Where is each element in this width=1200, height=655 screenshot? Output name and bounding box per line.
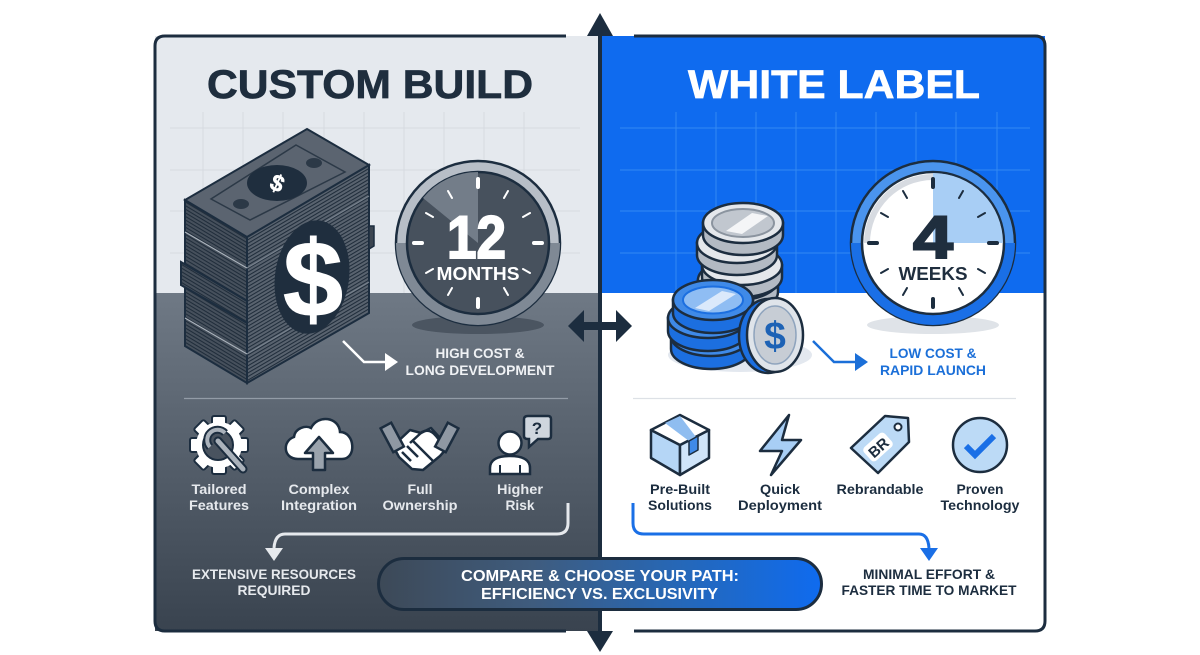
callout: compare and choose: COMPARE & CHOOSE YOUR PATH: [461,568,739,585]
arrow: to minimal effort [633,503,938,561]
icon: check badge [953,418,1007,472]
icon: clock 12 months [396,161,560,334]
text: high cost and long development: HIGH COST & [436,345,524,361]
labels: custom build features: Integration [281,497,357,513]
text: minimal effort and faster time to market: MINIMAL EFFORT & [863,566,995,582]
icon: clock 12 months: 12 [447,204,506,271]
icon: clock 4 weeks: WEEKS [898,264,968,284]
icon: money stack: $ [283,218,343,339]
icon: price tag [851,416,909,473]
labels: custom build features: Risk [506,497,535,513]
icon: person with question [490,416,551,474]
icon: coin stacks [668,203,812,373]
arrow: to high cost [343,341,398,371]
callout: compare and choose [378,558,822,610]
icon: clock 4 weeks: 4 [913,204,954,271]
text: low cost and rapid launch: LOW COST & [890,345,976,361]
callout: compare and choose: EFFICIENCY VS. EXCLUSIVITY [481,586,718,603]
icon: money stack [181,129,374,383]
labels: custom build features: Complex [288,481,350,497]
heading: custom build: CUSTOM BUILD [207,63,533,107]
arrow: to low cost [813,341,868,371]
heading: white label: WHITE LABEL [688,63,980,107]
labels: custom build features: Higher [497,481,544,497]
icon: coin stacks: $ [764,315,786,358]
labels: white label features: Solutions [648,497,712,513]
arrow: two-way comparison [568,310,632,342]
labels: custom build features: Features [189,497,249,513]
icon: clock 4 weeks [851,161,1015,334]
text: high cost and long development: LONG DEVELOPMENT [406,362,555,378]
labels: white label features [648,481,1020,513]
icon: box [651,415,709,475]
icon: price tag: BR [865,434,893,462]
icon: clock 12 months: MONTHS [436,264,520,284]
labels: white label features: Quick [760,481,800,497]
labels: custom build features [189,481,544,513]
labels: white label features: Technology [940,497,1020,513]
text: extensive resources required: EXTENSIVE RESOURCES [192,566,356,582]
labels: white label features: Deployment [738,497,822,513]
icon: lightning bolt [760,415,801,475]
text: extensive resources required: REQUIRED [238,582,310,598]
center divider with arrows [587,13,613,652]
icon: money stack: $ [266,169,289,198]
text: minimal effort and faster time to market: FASTER TIME TO MARKET [842,582,1017,598]
text: low cost and rapid launch: RAPID LAUNCH [880,362,986,378]
icon: cloud upload [286,419,352,470]
panel: white label [600,36,1045,631]
labels: white label features: Rebrandable [836,481,924,497]
icon: person with question: ? [532,419,542,438]
icon: handshake [381,423,458,470]
panel: custom build [155,36,600,631]
arrow: to extensive resources [265,503,568,561]
labels: custom build features: Full [408,481,432,497]
labels: white label features: Proven [956,481,1004,497]
labels: custom build features: Tailored [192,481,246,497]
labels: white label features: Pre-Built [650,481,710,497]
labels: custom build features: Ownership [382,497,458,513]
icon: gear and wrench [190,416,248,474]
